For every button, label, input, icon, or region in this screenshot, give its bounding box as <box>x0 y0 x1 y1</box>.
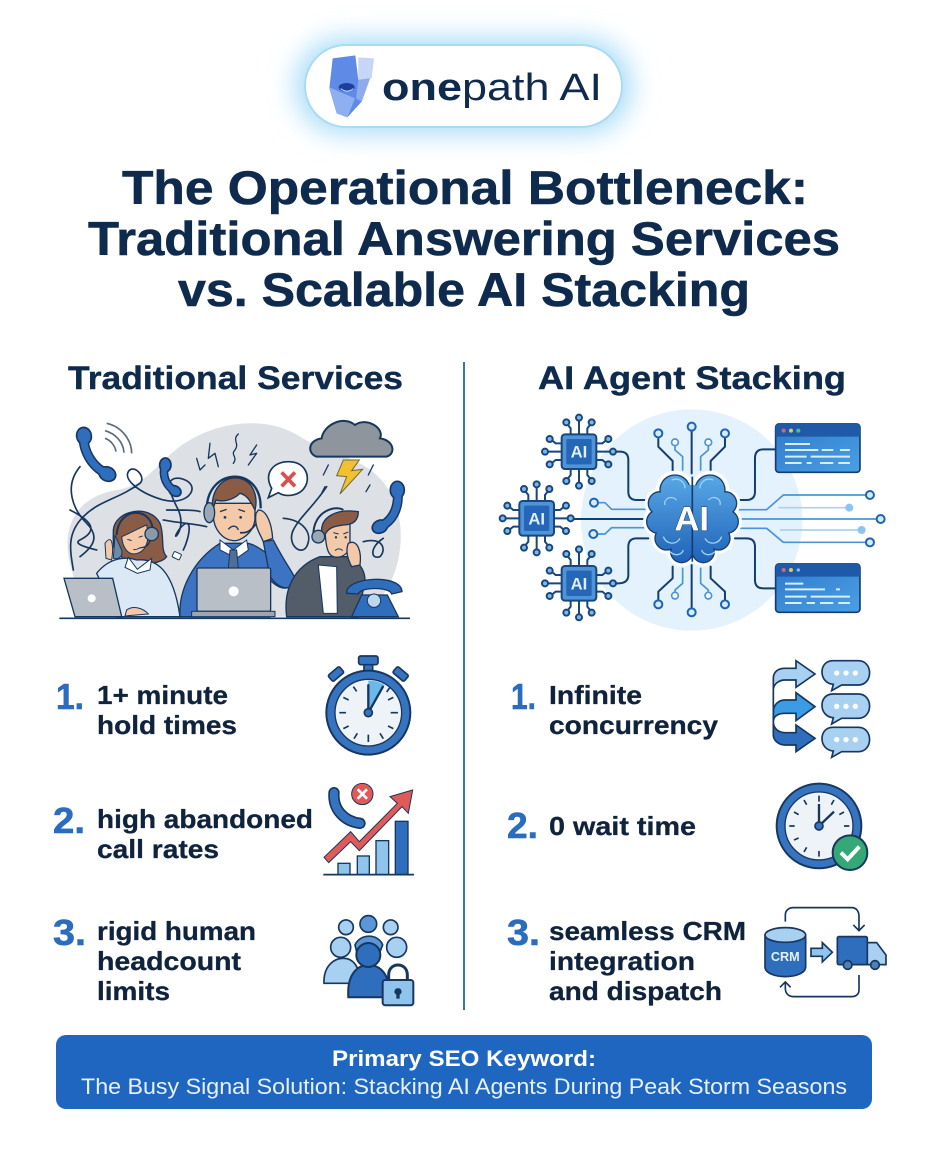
light circuit traces <box>598 446 877 592</box>
person: man with headset, right <box>286 508 365 617</box>
title <box>88 161 840 316</box>
icon: phone handset right <box>370 481 404 536</box>
item 1: hold times: hold times <box>97 710 237 740</box>
item 3: headcount limits: rigid human <box>97 916 256 946</box>
item 3: headcount limits <box>53 912 256 1006</box>
icon: phone handset small <box>160 458 183 498</box>
item 2: zero wait time <box>507 805 696 846</box>
icon: brain <box>643 471 742 566</box>
logo wordmark: one path AI <box>382 67 602 109</box>
banner: primary SEO keyword: The Busy Signal Solution: Stacking AI Agents During Peak Storm Seasons <box>81 1074 847 1099</box>
heading: AI agent stacking: AI Agent Stacking <box>538 360 846 396</box>
illustration: AI brain network <box>500 409 885 631</box>
item 1: infinite concurrency: 1. <box>511 676 536 717</box>
title: vs. Scalable AI Stacking <box>178 263 750 316</box>
icon: unplugged cord <box>172 551 182 560</box>
icon: clock with check <box>777 784 867 870</box>
person: man with headset, center <box>180 477 296 617</box>
icon: desk telephone <box>347 579 402 617</box>
icon: app window top <box>776 424 860 472</box>
item 3: CRM integration: seamless CRM <box>549 916 746 946</box>
item 2: zero wait time: 0 wait time <box>549 811 696 841</box>
item 1: hold times: 1+ minute <box>97 680 228 710</box>
person: woman with headset <box>97 511 180 617</box>
left list icons <box>323 656 414 1005</box>
icon: chip bottom: AI <box>571 574 587 593</box>
banner: primary SEO keyword: Primary SEO Keyword: <box>332 1046 596 1071</box>
item 3: headcount limits: 3. <box>53 912 86 953</box>
item 1: infinite concurrency: Infinite <box>549 680 642 710</box>
icon: branching arrows to chat bubbles <box>773 661 870 757</box>
banner: primary SEO keyword <box>56 1035 872 1109</box>
icon: people with lock <box>324 916 413 1005</box>
icon: chip bottom <box>542 546 616 620</box>
item 1: infinite concurrency <box>511 676 719 740</box>
item 3: CRM integration: 3. <box>507 912 540 953</box>
icon: app window bottom <box>776 564 860 612</box>
right list icons <box>765 661 886 997</box>
item 3: CRM integration <box>507 912 746 1006</box>
illustration: overwhelmed call center <box>59 421 410 618</box>
icon: red x speech bubble <box>268 462 307 498</box>
right list <box>507 676 746 1006</box>
item 1: infinite concurrency: concurrency <box>549 710 719 740</box>
item 2: abandoned call rates <box>53 800 313 864</box>
item 3: headcount limits: headcount <box>97 946 241 976</box>
left list <box>53 676 313 1006</box>
title: The Operational Bottleneck: <box>122 161 808 214</box>
laptop: left <box>64 578 148 617</box>
item 2: zero wait time: 2. <box>507 805 538 846</box>
icon: brain: AI <box>674 500 709 538</box>
logo badge <box>295 38 632 134</box>
laptop: center <box>192 568 275 617</box>
icon: chip top <box>542 415 616 489</box>
item 3: CRM integration: and dispatch <box>549 976 722 1006</box>
item 3: CRM integration: integration <box>549 946 695 976</box>
icon: CRM database to truck loop <box>765 908 886 997</box>
item 1: hold times: 1. <box>56 676 84 717</box>
item 2: abandoned call rates: 2. <box>53 800 85 841</box>
icon: stopwatch <box>326 656 410 755</box>
icon: logo mask <box>329 55 374 117</box>
item 2: abandoned call rates: call rates <box>97 834 219 864</box>
icon: chip top: AI <box>571 443 587 462</box>
center divider <box>463 362 465 1010</box>
icon: chip middle: AI <box>528 509 545 528</box>
title: Traditional Answering Services <box>88 212 840 265</box>
icon: phone handset left <box>75 426 118 484</box>
icon: CRM database to truck loop: CRM <box>771 950 800 964</box>
icon: phone and rising chart <box>323 783 414 875</box>
icon: chip middle <box>500 481 574 555</box>
item 2: abandoned call rates: high abandoned <box>97 804 313 834</box>
item 1: hold times <box>56 676 237 740</box>
dark circuit traces <box>572 430 776 609</box>
item 3: headcount limits: limits <box>97 976 170 1006</box>
icon: storm cloud <box>310 421 392 494</box>
icon: wifi arcs <box>105 423 132 453</box>
heading: traditional services: Traditional Services <box>68 360 403 396</box>
